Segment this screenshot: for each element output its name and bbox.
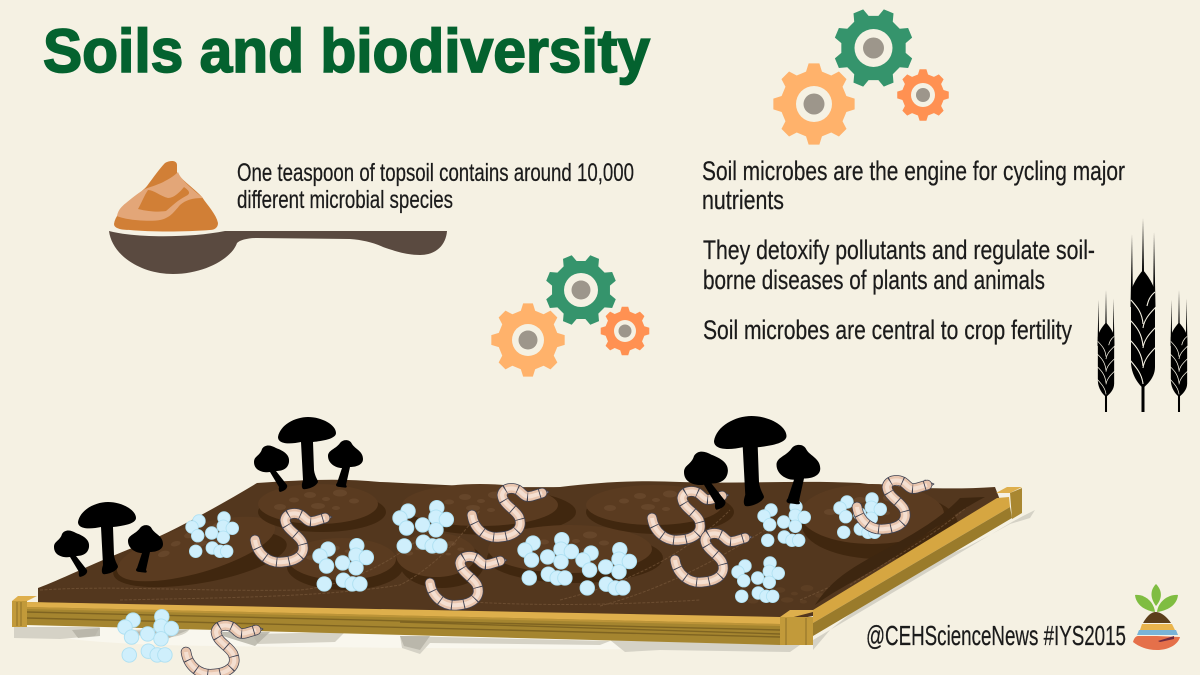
text: microbe facts	[702, 156, 1125, 345]
wooden frame	[12, 487, 1022, 645]
text: teaspoon fact	[237, 159, 634, 214]
right rail	[813, 497, 1010, 623]
left post	[12, 596, 37, 601]
icon: teaspoon of soil	[109, 161, 447, 274]
icon: small gears	[491, 243, 649, 377]
text: microbe facts: borne diseases of plants and animals	[703, 265, 1045, 295]
worms	[186, 480, 934, 674]
text: teaspoon fact: different microbial species	[237, 186, 453, 214]
soil cracks	[40, 500, 975, 606]
soil highlight	[117, 172, 203, 221]
corner post	[780, 610, 813, 618]
icon: IYS logo	[1133, 584, 1180, 650]
spoon	[109, 231, 447, 274]
text: microbe facts: They detoxify pollutants and regulate soil-	[703, 235, 1095, 265]
text: microbe facts: Soil microbes are central to crop fertility	[703, 315, 1072, 345]
microbes	[118, 493, 887, 662]
front rail	[27, 602, 780, 645]
title: Soils and biodiversity	[43, 17, 650, 85]
text: teaspoon fact: One teaspoon of topsoil contains around 10,000	[237, 159, 634, 187]
icon: wheat	[1097, 218, 1188, 412]
icon: large gears	[773, 0, 949, 145]
mushrooms	[54, 416, 820, 577]
soil bed	[38, 480, 1000, 622]
mounds	[109, 520, 291, 598]
text: microbe facts: nutrients	[702, 185, 784, 215]
soil speckles	[154, 490, 909, 604]
soil heap	[114, 161, 218, 232]
ground shadow	[14, 510, 1035, 654]
back post	[996, 487, 1022, 493]
